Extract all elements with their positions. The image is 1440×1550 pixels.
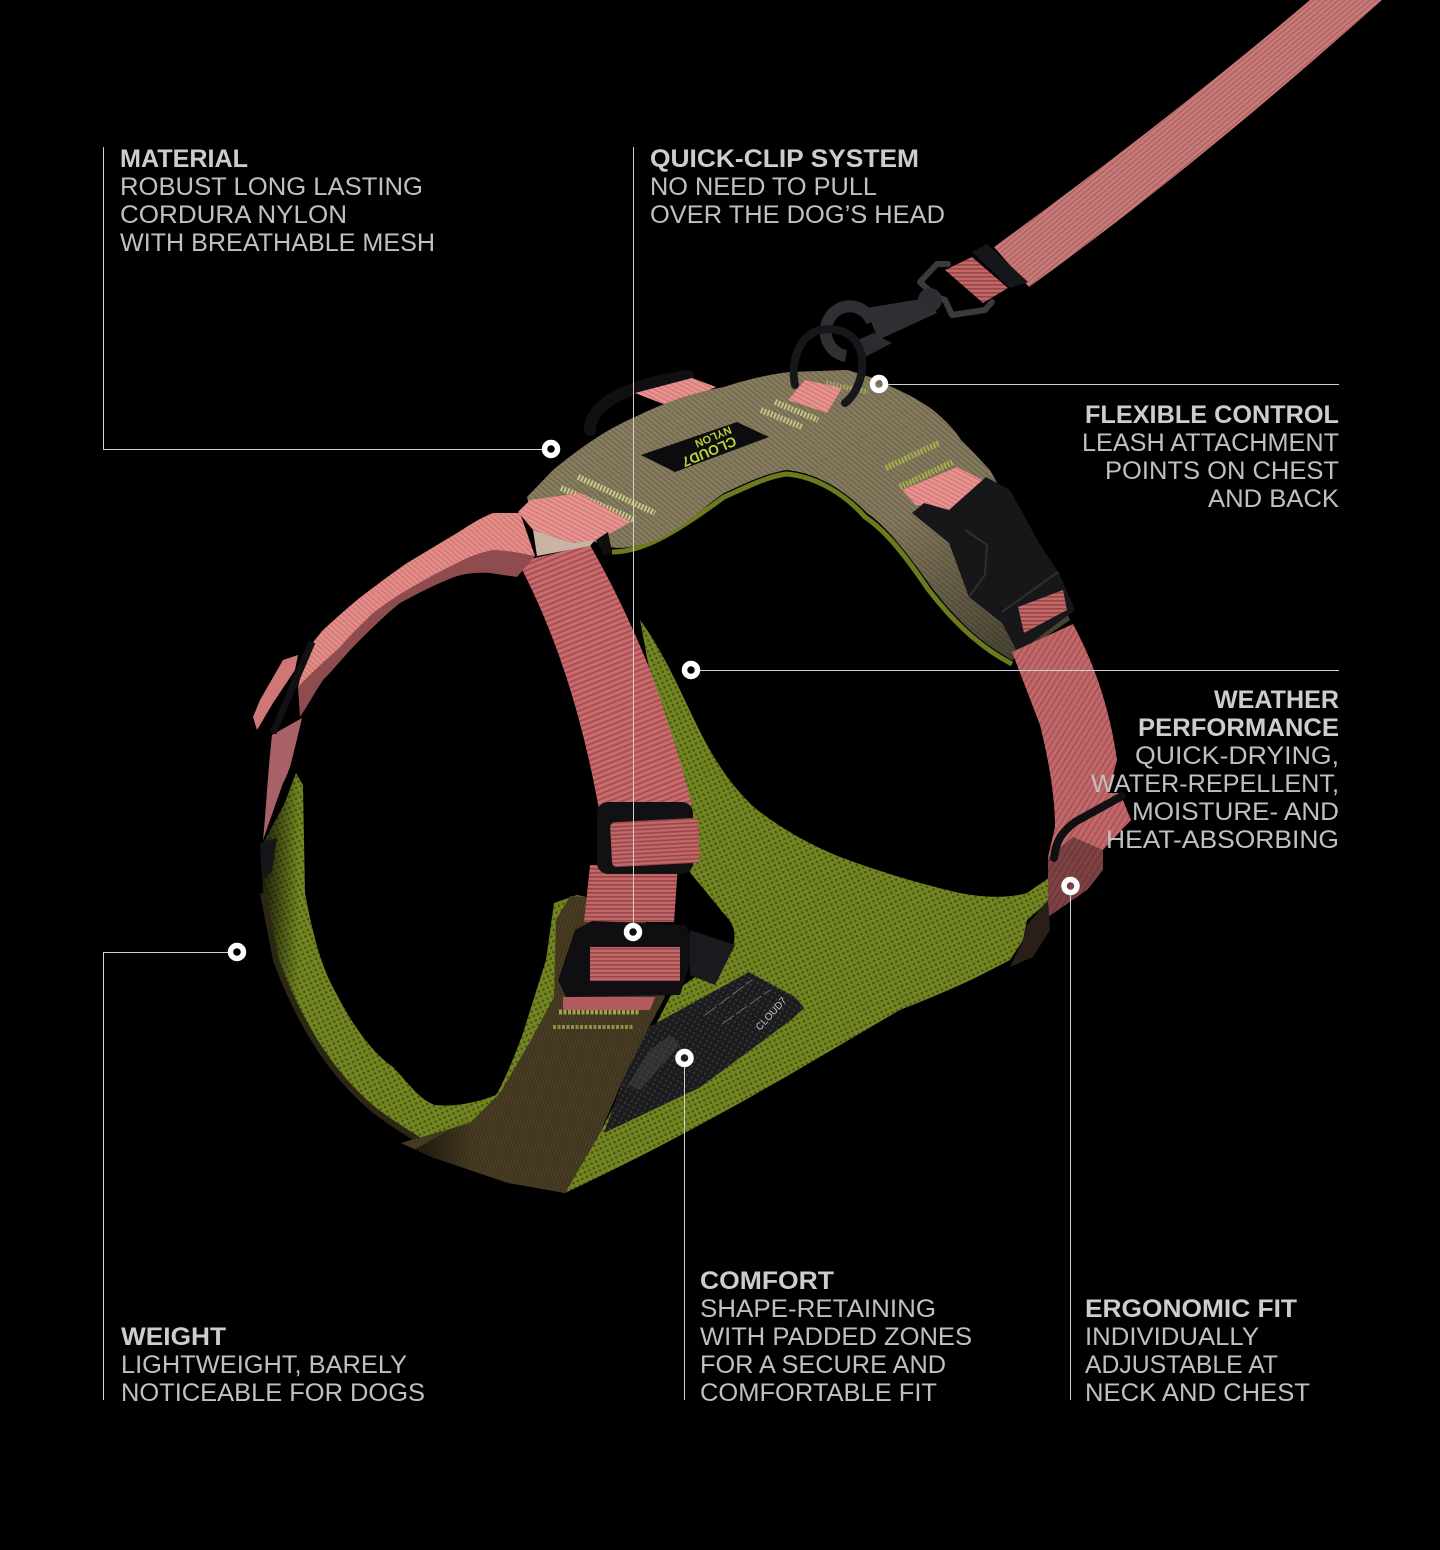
callout: weight: LIGHTWEIGHT, BARELY bbox=[121, 1351, 407, 1379]
callout: ergonomic fit: NECK AND CHEST bbox=[1085, 1379, 1310, 1407]
callout: material: ROBUST LONG LASTING bbox=[120, 173, 423, 201]
top leash loop bbox=[788, 380, 842, 413]
leader line bbox=[1070, 892, 1072, 1400]
callout: weight: NOTICEABLE FOR DOGS bbox=[121, 1379, 425, 1407]
callout: comfort: FOR A SECURE AND bbox=[700, 1351, 946, 1379]
logo patch: NYLON bbox=[693, 423, 733, 449]
right pink strap bbox=[1012, 624, 1131, 917]
right strap lower shade bbox=[1048, 837, 1103, 917]
rubber chest patch bbox=[604, 972, 804, 1133]
callout: material bbox=[104, 145, 545, 450]
callout: weight: WEIGHT bbox=[121, 1323, 226, 1351]
callout: comfort: SHAPE-RETAINING bbox=[700, 1295, 936, 1323]
callout: weight bbox=[104, 952, 425, 1407]
callout: quick-clip system: OVER THE DOG’S HEAD bbox=[650, 201, 945, 229]
callout: flexible control bbox=[885, 384, 1339, 513]
rear D-ring and strap bbox=[590, 376, 716, 430]
leader line bbox=[697, 670, 1339, 672]
right side loop bbox=[902, 467, 988, 510]
leash ring bbox=[794, 329, 862, 403]
logo patch: CLOUD7 bbox=[679, 433, 739, 471]
callout: ergonomic fit: ERGONOMIC FIT bbox=[1085, 1295, 1297, 1323]
upper slider buckle bbox=[597, 802, 700, 874]
strap end under mesh bbox=[1010, 900, 1050, 967]
pad green lining edge bbox=[612, 474, 1012, 664]
tan padded back panel bbox=[527, 370, 1070, 660]
side release buckle bbox=[912, 477, 1075, 653]
callout: weather performance: HEAT-ABSORBING bbox=[1106, 826, 1339, 854]
callout: weather performance bbox=[697, 670, 1339, 854]
strap knot bbox=[518, 493, 631, 556]
lower quick clip buckle bbox=[558, 921, 735, 1010]
callout: material: WITH BREATHABLE MESH bbox=[120, 229, 435, 257]
leash swivel clip bbox=[826, 264, 992, 358]
callout: flexible control: FLEXIBLE CONTROL bbox=[1085, 401, 1339, 429]
logo patch bbox=[641, 422, 769, 472]
callout: flexible control: AND BACK bbox=[1208, 485, 1339, 513]
leader line bbox=[684, 1064, 686, 1400]
callout: quick-clip system: QUICK-CLIP SYSTEM bbox=[650, 145, 919, 173]
callout: ergonomic fit: ADJUSTABLE AT bbox=[1085, 1351, 1278, 1379]
callout: quick-clip system bbox=[634, 145, 945, 925]
callout: comfort: COMFORTABLE FIT bbox=[700, 1379, 937, 1407]
left mesh band bbox=[262, 773, 600, 1193]
callout: flexible control: LEASH ATTACHMENT bbox=[1082, 429, 1339, 457]
leader line bbox=[885, 384, 1339, 386]
band outer stitching bbox=[263, 893, 431, 1147]
right lower slider bbox=[1054, 796, 1122, 858]
callout: ergonomic fit bbox=[1070, 892, 1310, 1407]
callout: weather performance: WATER-REPELLENT, bbox=[1091, 770, 1339, 798]
callout: weather performance: WEATHER bbox=[1214, 686, 1339, 714]
hotspot markers bbox=[230, 378, 1077, 1064]
callout: comfort bbox=[684, 1064, 972, 1407]
harness illustration bbox=[253, 0, 1382, 1195]
leash strap bbox=[945, 0, 1382, 303]
callout: ergonomic fit: INDIVIDUALLY bbox=[1085, 1323, 1259, 1351]
left flap bbox=[253, 655, 298, 730]
callout: comfort: WITH PADDED ZONES bbox=[700, 1323, 972, 1351]
callout: quick-clip system: NO NEED TO PULL bbox=[650, 173, 877, 201]
callout: weather performance: QUICK-DRYING, bbox=[1135, 742, 1339, 770]
left pink shoulder strap bbox=[298, 513, 535, 717]
callout: comfort: COMFORT bbox=[700, 1267, 834, 1295]
left slider bar bbox=[273, 642, 312, 733]
rubber chest patch: CLOUD7 bbox=[754, 995, 790, 1033]
callout: weather performance: MOISTURE- AND bbox=[1132, 798, 1339, 826]
center pink strap bbox=[518, 545, 692, 815]
leader line bbox=[632, 147, 634, 925]
right mesh panel bbox=[565, 620, 1050, 1193]
lower back strap edge bbox=[260, 838, 277, 880]
lower center pink strap bbox=[584, 865, 678, 922]
left lower strap bbox=[263, 718, 302, 840]
callout: material: MATERIAL bbox=[120, 145, 248, 173]
chest strap brown webbing bbox=[401, 896, 665, 1195]
callout: flexible control: POINTS ON CHEST bbox=[1105, 457, 1339, 485]
leader line bbox=[104, 952, 232, 1400]
callout: weather performance: PERFORMANCE bbox=[1138, 714, 1339, 742]
leader line bbox=[104, 147, 545, 450]
callout: material: CORDURA NYLON bbox=[120, 201, 347, 229]
